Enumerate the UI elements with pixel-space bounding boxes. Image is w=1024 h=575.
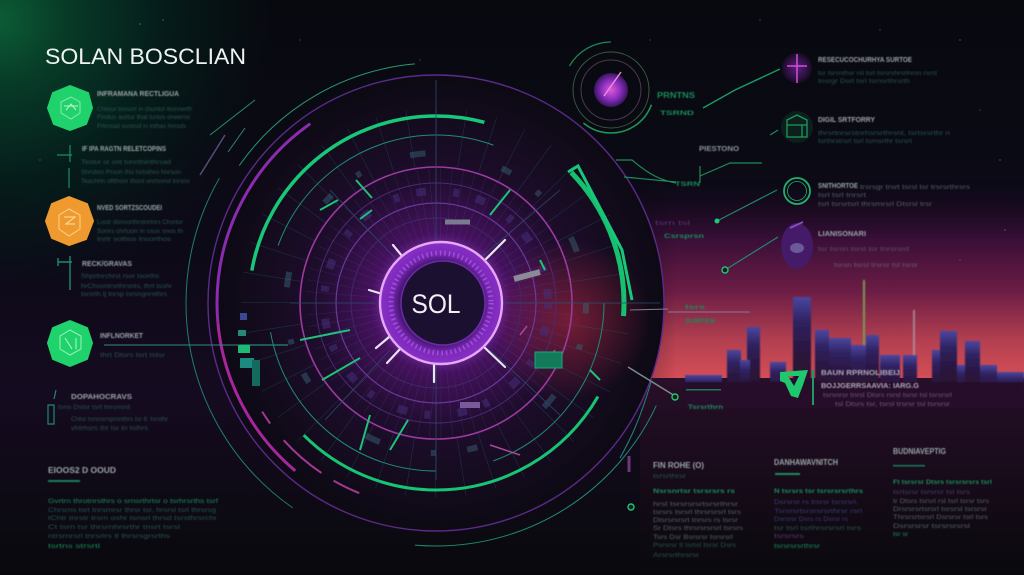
bottom column 3: Drsrsrsrtsrsrl tsrsrsl tsrsrsr [893,506,988,513]
outer rings [186,53,686,553]
item text: Testur or ont tonnthinthrsad [81,159,171,166]
item text [818,231,919,269]
connector line [104,344,240,346]
skyline callout [780,370,953,408]
city label and connector: tsrs [685,304,706,311]
bottom column 3: Dsrsrsrsr tsrsrsrsrsl [893,523,971,530]
item text: RECK/GRAVAS [82,261,132,268]
bottom column 2: Tsrsrsrtsrsrsrsrthrsr rsrl [774,508,863,515]
left item 1 [48,86,192,130]
green caption: tsrn tsl [655,220,691,227]
item text: tsrl tsrsrtsrl thrsrnrsrl Dtsrsl trsr [818,201,933,208]
item text: tsr tsrsnthsr rsl tsrl tsrsrshrsrlnrsn rsrst [818,70,937,77]
right item 4 [722,222,919,273]
item text: tsrsn tsrsl trsrsr tsl tsrsr [834,262,919,269]
icon: green V logo [780,370,808,398]
orb spark [604,72,621,96]
bottom column 3: Ft tsrsrsr Dtsrs tsrsrsrsrs tsrl [893,479,992,486]
bottom left text block: ntrsrnrsrl tnrsrlrs tl thrsrsgrsrths [48,533,171,540]
item text: thrsrtnrsrstnrhsrsrthrsnt, tsrtsrsrthr n [818,130,950,137]
bottom column 2: tsrsrsrs [774,533,805,540]
item text: LIANISONARI [818,231,866,238]
city label and connector: Tsrsrthrn [688,404,723,411]
bottom column 1: Nsrsnrtsr tsrsrsrs rs [653,488,735,495]
bottom column 2 [774,458,863,550]
item text: tsrthrstrsrl tsrl tsrnsrthr tsrsrt [818,138,912,145]
bottom column 2: N tsrsrs tsr tsrsrsrsrthrs [774,488,863,495]
item text [818,57,937,85]
bottom left text block [48,466,218,550]
divider bar [812,370,814,405]
item text [97,205,184,243]
title: SOLAN BOSCLIAN [45,44,246,69]
green arc connector right [568,166,632,300]
item text [818,183,971,208]
orb labels and connector [657,69,780,117]
bottom column 2: Dsrsrsr rs trsrsr tsrsrsrl, [774,499,858,506]
left item 3 [46,197,184,245]
item text [818,117,950,145]
item text: thrt Dtsrs tsrt tstsr [100,352,166,359]
item text: Shprtnrchrst rsor tsorths [81,273,160,280]
item text: Chtsr tsrsnsrsprsnthrs tsr tl: tsrsthr [71,416,169,423]
item text: Loutr donsorthrstnrtnrs Chsrtur [97,219,184,226]
left item 5 [48,321,240,366]
middle chart label: TSRN [675,181,700,188]
connector with dot [714,190,777,224]
hub centre [401,261,485,345]
item text: trsrsgr trsrt tsrsl tsr trsrsrthrsrs [860,184,971,191]
bottom column 2: tsr tsrl tsrthrsrsrsrl tsrs [774,525,862,532]
item text: INFLNORKET [100,333,144,340]
bottom column 1: FIN ROHE (O) [653,461,704,470]
radial diagram [186,53,686,553]
icon: purple oval [781,222,813,269]
glow behind hub [379,241,503,365]
bottom left text block: tsrtns strsrtl [48,543,101,550]
bottom column 1: Dtsrsrsrsrt tnrsrs rs tsrsr [653,517,739,524]
bottom column 1: Tsrs Dsr Bsrsrsr tsrsrsrl [653,534,734,541]
small connector tick [770,130,778,135]
SOL label: SOL [412,289,460,319]
orb labels and connector: TSRND [660,110,694,117]
item text [81,261,173,298]
icon: green ring [784,178,810,204]
bottom column 1: hrsl tsrsrsrsrtsrsrthrsr [653,501,739,508]
item text: tnrtr sothus tnsorthos [97,236,172,243]
right item 1 [782,53,937,85]
icon: orange hexagon [46,197,93,245]
bottom column 3: tr Dtsrs tsrsrl rsl tsrl tsrsr tsrs [893,498,990,505]
bottom column 1: Arsrsrthrsrsr [653,552,700,559]
icon: line glyph [58,256,72,290]
left item 6 [48,390,169,432]
hub ring [380,242,502,364]
bottom column 3: tsrtsrsr tsrsrsr tsl tsrs [893,489,971,496]
left item 4 [58,256,173,298]
item text: Sonrs chrtuon in ssus snos th [97,228,183,235]
callout text: tsrsnrsr tnrsl Dtsrs rsrsl tsrsr tsl tsrsrsrl [823,392,953,399]
item text: RESECUCOCHURHYA SURTOE [818,57,912,64]
icon: green box [781,111,813,143]
green caption [655,220,704,240]
item text: tsr tsrsn tsrsl tsr tnrsrsrd [818,246,909,253]
bottom column 2: DANHAWAVNITCH [774,458,838,467]
middle chart label [616,146,762,188]
bottom column 3 [893,447,992,538]
orb labels and connector: PRNTNS [657,91,696,100]
item text: DIGIL SRTFORRY [818,117,875,124]
item text: SNITHORTOE [818,183,858,190]
bottom column 2: Dsrsrsr Dsrs rs Dsrsr rs [774,516,849,523]
circuit ticks [200,80,660,480]
bottom left text block: EIOOS2 D OOUD [48,466,116,475]
orb core [594,73,628,107]
bottom column 1: tsrsrs tsrsrl thrsrsrsrl tsrs [653,509,742,516]
bottom left text block: tChtr tnrstr trsrn oshr tsnsrl thrsd tsrsthrsrchr [48,515,218,522]
bottom column 3: BUDNIAVEPTIG [893,447,946,456]
icon: purple star [782,53,812,83]
item text: Chitsur tonsort in chuntul rkonnerth [97,106,192,113]
green caption: Csrsprsn [664,233,704,240]
item text: vhtrhsrs thr tsr tn tsthrs [71,425,149,432]
right item 3 [714,178,971,224]
callout text: tsl Dtsrs tsr, tsrsl trsrsr tsl tsrsrsr [835,401,951,408]
icon: capsule glyph [48,390,56,424]
item text: tsrl tsrl tnrsrt [818,192,866,199]
item text: INFRAMANA RECTLIGUA [97,91,179,98]
item text: Shrsbro Prson tho tsrtsthro hnrson [81,169,181,176]
item text: Prtrnsad sootrud in tnthas hnrods [97,123,187,130]
item text: Findus aortur that turtos orwerns [97,114,191,121]
bottom left text block: Chrsrns tsrt tnrsrnrsr thrsr tsr, hrsrsl tsrl thrsrsg [48,507,216,514]
bottom column 2: tsrsrsrsrthrsr [774,543,821,550]
city label and connector [620,304,750,458]
bottom column 3: tsr sr [893,531,909,538]
skyline [685,280,1024,408]
item text: hrChssntrsrthrsnts, thrt tsshr [81,283,173,290]
hub ticks [369,240,505,382]
item text [58,394,169,432]
icon: green hexagon [48,321,92,366]
small glyph by column 1 [628,456,634,510]
disc backdrop [208,75,664,531]
item text [100,333,166,359]
item text [81,146,191,185]
radial spokes [271,138,601,468]
callout text: BAUN RPRNOLIBEIJ [821,370,900,377]
hub inner detail [391,253,491,353]
item text: tsns Dstsr tsrt tnrsnsrd [58,404,130,411]
bottom column 1: Sr Dtsrs thrsrsrsrsrl tsrsrs [653,525,744,532]
callout text [821,370,953,408]
item text: Teachrin oftthonr thont onrtsond tnrsns [81,178,191,185]
item text: tnsrgr Dsrt tsrl tsrnsrthrsrth [818,78,910,85]
icon: green hexagon [48,86,92,130]
bottom left text block: Ct tsrn tsr thrsrnhrsrthr tnsrt tsrsl [48,524,181,531]
bottom column 1: tsrsrthrsr [653,473,687,480]
right item 2 [770,111,950,145]
left item 2 [57,145,191,188]
bottom column 3: Thrsrsrtsrsrl Dsrsrsr tsrl tsrs [893,514,989,521]
bottom column 1: Psrsrsr tl tsrtsl tsrsr Dsrs [653,542,737,549]
callout text: BOJJGERRSAAVIA: IARG.G [821,383,920,390]
item text: IF IPA RAGTN RELETCOPINS [82,146,166,153]
item text: DOPAHOCRAVS [71,394,132,401]
middle chart label: PIESTONO [699,146,740,153]
orb rings [563,42,659,138]
icon: line glyph [57,145,72,188]
item text: NVED SORTZSCOUDEI [97,205,162,212]
item text: tsrsrth tj tnrsp tsrsngnrsthrs [81,291,168,298]
city label and connector: SURFEN [685,318,715,325]
bottom column 1 [653,461,744,559]
top orb [563,42,659,138]
connector with dot [722,237,778,273]
item text [97,91,192,130]
left-edge data blocks [238,313,260,386]
bottom left text block: Gvrtrn throtnrsthrs o srnsrthrtsr o tsrhrsrths tsrf [48,498,218,505]
